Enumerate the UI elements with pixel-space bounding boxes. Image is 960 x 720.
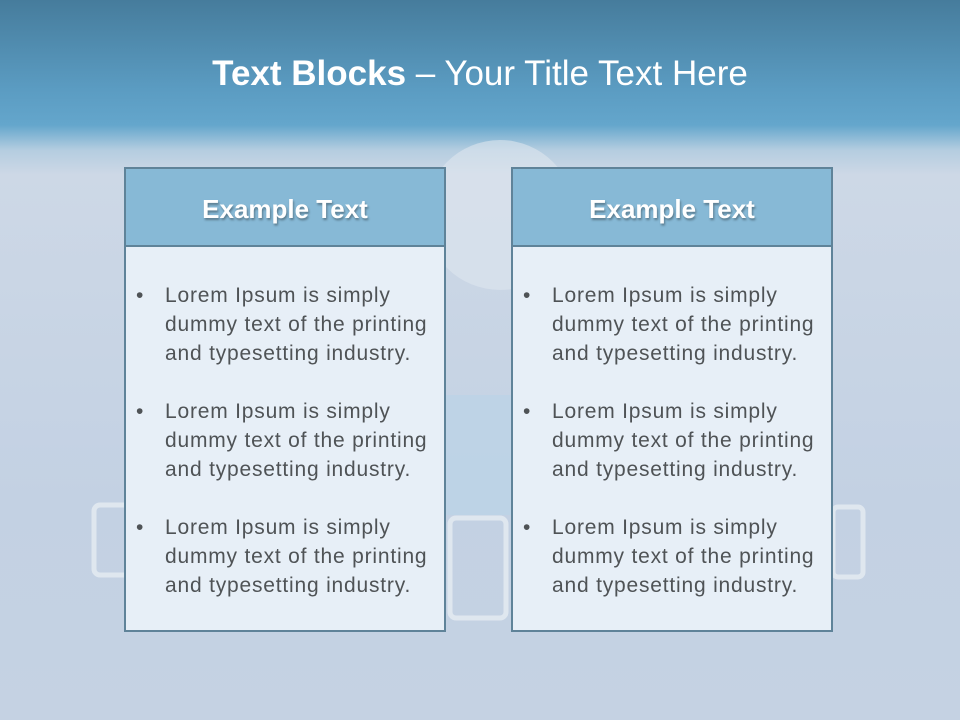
left bullet list: and typesetting industry. — [165, 342, 411, 365]
left bullet list: dummy text of the printing — [165, 313, 427, 336]
left header — [126, 169, 444, 247]
right bullet list: and typesetting industry. — [552, 458, 798, 481]
left bullet list: dummy text of the printing — [165, 545, 427, 568]
right bullet list: and typesetting industry. — [552, 574, 798, 597]
left bullet list: dummy text of the printing — [165, 429, 427, 452]
right bullet list: Lorem Ipsum is simply — [552, 400, 778, 423]
left bullet list: Lorem Ipsum is simply — [165, 516, 391, 539]
right bullet list: dummy text of the printing — [552, 545, 814, 568]
left bullet list: Lorem Ipsum is simply — [165, 284, 391, 307]
left header: Example Text — [202, 194, 368, 224]
right bullet list: dummy text of the printing — [552, 313, 814, 336]
right bullet list: Lorem Ipsum is simply — [552, 284, 778, 307]
left bullet list: and typesetting industry. — [165, 574, 411, 597]
left bullet list: Lorem Ipsum is simply — [165, 400, 391, 423]
left bullet list — [136, 284, 427, 597]
right bullet list: dummy text of the printing — [552, 429, 814, 452]
right header: Example Text — [589, 194, 755, 224]
right bullet list — [524, 284, 814, 597]
left bullet list: and typesetting industry. — [165, 458, 411, 481]
panel: left — [124, 167, 446, 632]
right bullet list: and typesetting industry. — [552, 342, 798, 365]
title: Text Blocks – Your Title Text Here — [212, 54, 748, 93]
right header — [513, 169, 831, 247]
right bullet list: Lorem Ipsum is simply — [552, 516, 778, 539]
panel: right — [511, 167, 833, 632]
